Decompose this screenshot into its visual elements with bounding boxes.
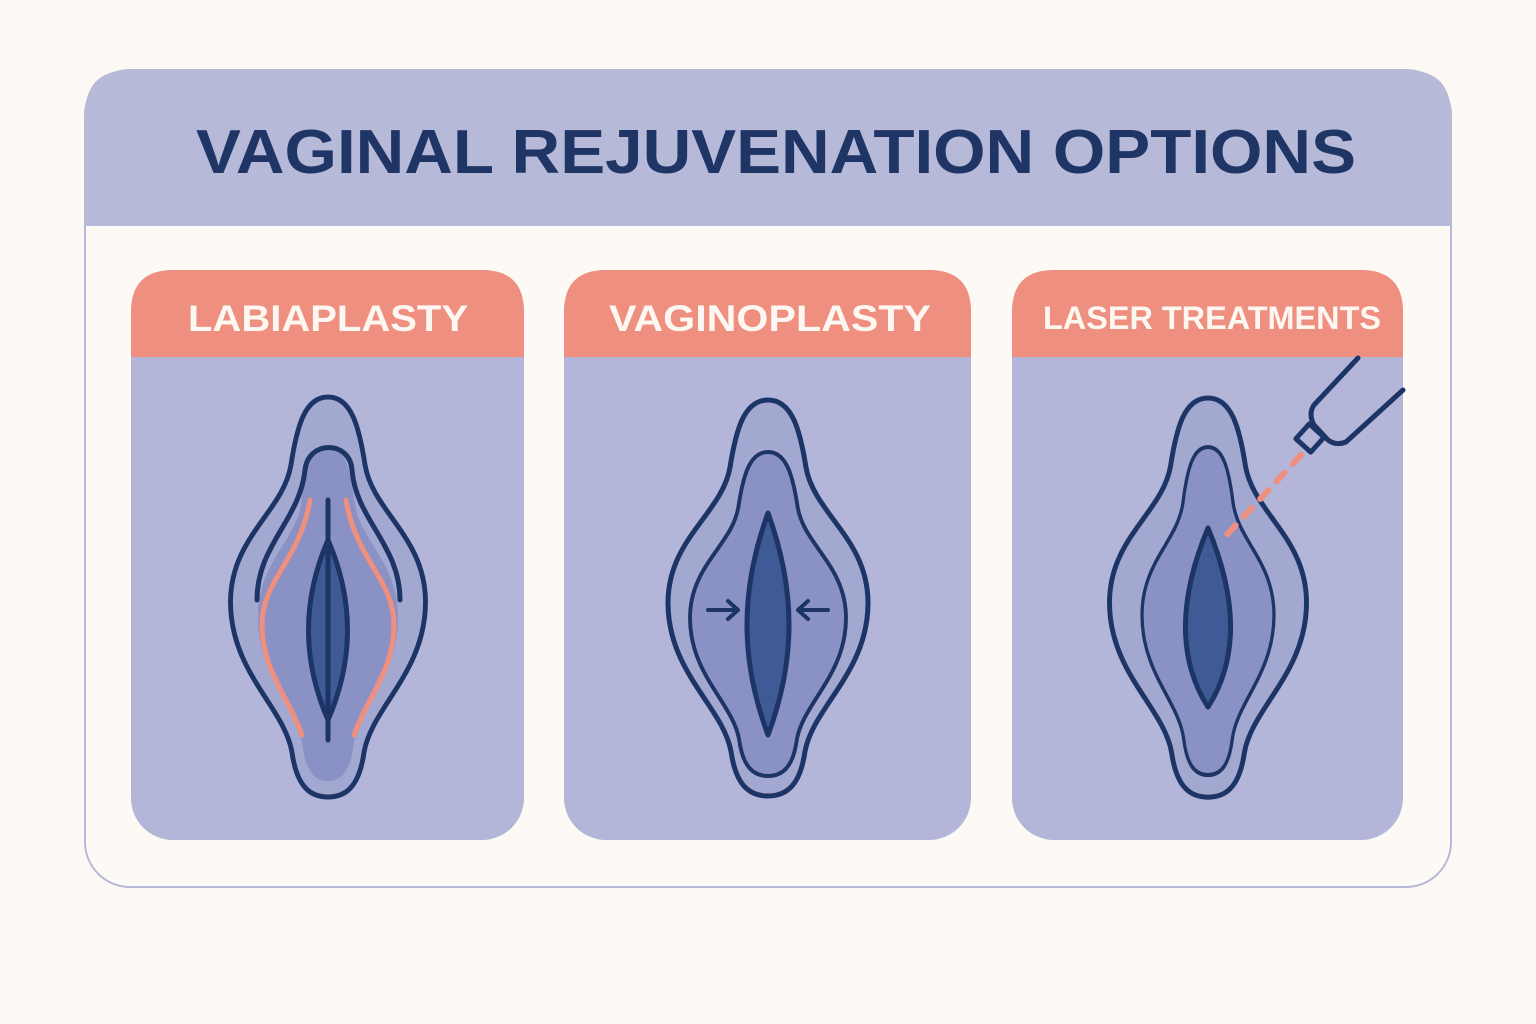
label: labiaplasty: LABIAPLASTY [188, 298, 468, 339]
icon: labiaplasty anatomy [230, 397, 426, 797]
panel: laser treatments [1012, 270, 1403, 840]
panel: labiaplasty [131, 270, 524, 840]
panel: vaginoplasty [564, 270, 971, 840]
main card [85, 70, 1451, 887]
label: vaginoplasty: VAGINOPLASTY [609, 298, 931, 339]
icon: vaginoplasty anatomy [668, 400, 868, 796]
icon: laser anatomy [1110, 398, 1306, 797]
arrows: tightening [708, 601, 828, 619]
header band [85, 70, 1451, 226]
laser beam [1222, 455, 1301, 540]
icon: laser device [1296, 358, 1403, 452]
title: VAGINAL REJUVENATION OPTIONS [196, 118, 1356, 187]
label: laser treatments: LASER TREATMENTS [1043, 300, 1381, 336]
